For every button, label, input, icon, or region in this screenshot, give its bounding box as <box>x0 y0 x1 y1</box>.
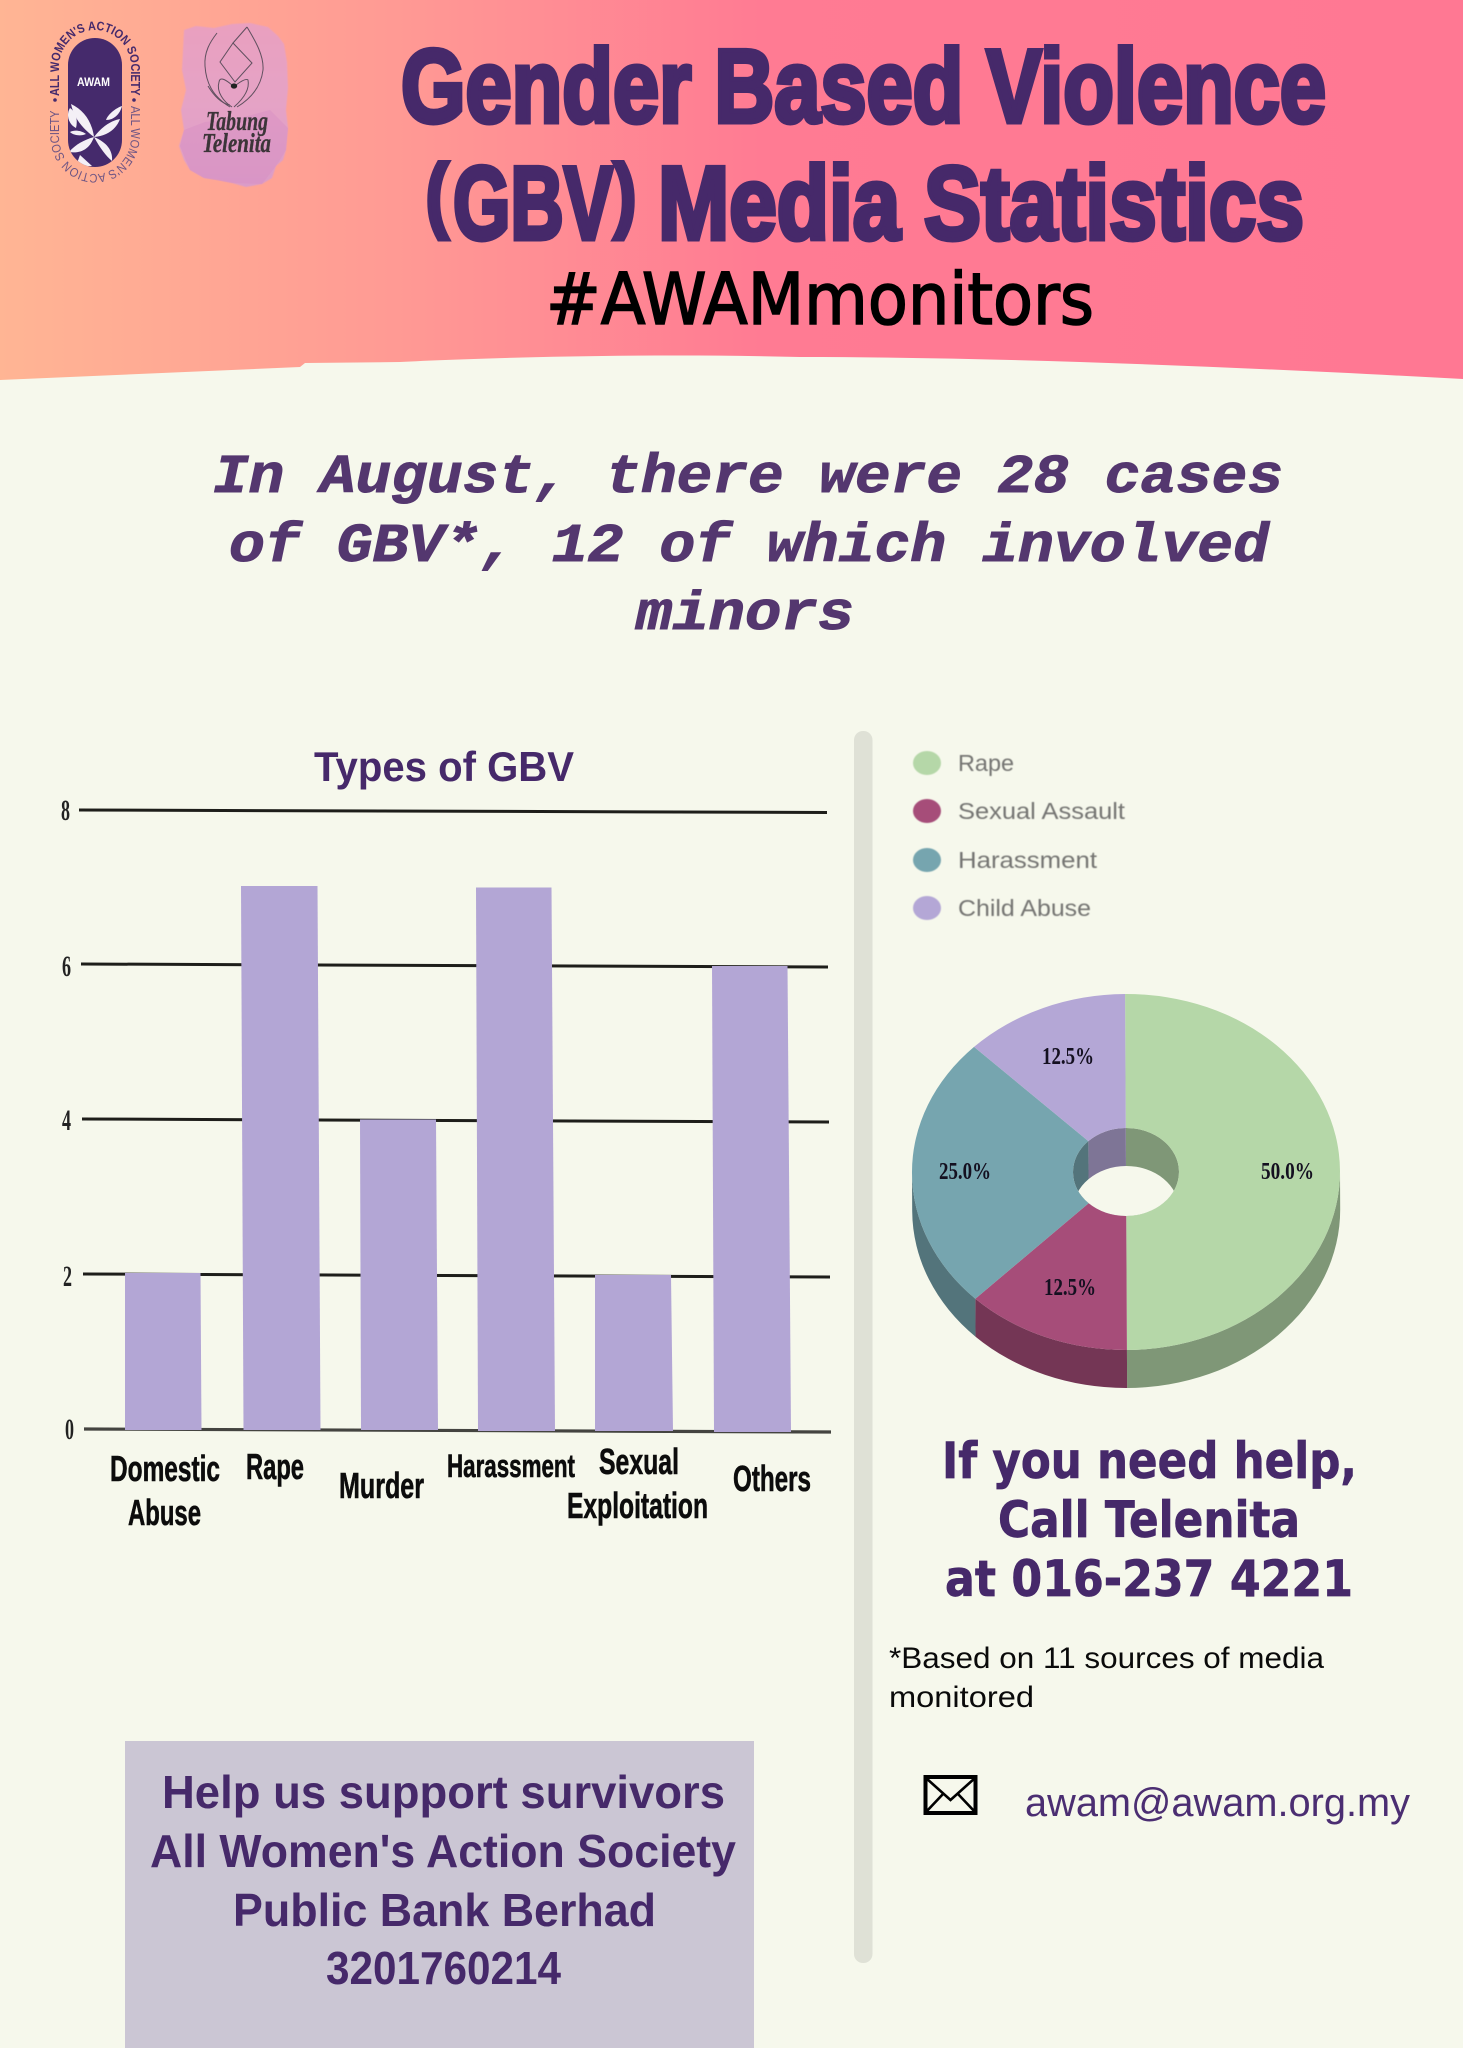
footnote: *Based on 11 sources of media <box>889 1642 1324 1675</box>
headline statement: minors <box>635 583 854 646</box>
logo: AWAM <box>50 22 140 183</box>
panel: donation box: Public Bank Berhad <box>233 1884 656 1936</box>
pie chart legend: Sexual Assault <box>958 798 1126 824</box>
donut chart: 50.0% <box>1261 1159 1314 1185</box>
helpline callout: Call Telenita <box>998 1491 1300 1549</box>
x axis labels: Domestic <box>110 1448 220 1489</box>
title: Media Statistics <box>658 146 1304 262</box>
title: ) <box>614 149 636 240</box>
logo: Tabung Telenita <box>179 23 288 187</box>
header banner <box>0 0 1463 380</box>
x axis labels: Sexual <box>599 1441 679 1482</box>
bar chart: Types of GBV <box>61 743 831 1533</box>
chart title: Types of GBV <box>314 743 574 790</box>
logo: Tabung Telenita: Tabung <box>206 106 268 136</box>
pie chart legend <box>913 750 1126 921</box>
x axis labels: Abuse <box>128 1492 201 1533</box>
footnote: monitored <box>889 1681 1034 1714</box>
donut chart: 12.5% <box>1042 1044 1094 1070</box>
headline statement: of GBV*, 12 of which involved <box>229 515 1270 578</box>
panel: donation box: Help us support survivors <box>162 1766 725 1818</box>
y axis labels <box>61 794 74 1446</box>
y axis labels: 4 <box>62 1104 71 1137</box>
panel: donation box: 3201760214 <box>326 1942 561 1994</box>
headline statement <box>213 446 1283 646</box>
pie chart legend: Child Abuse <box>958 895 1091 921</box>
y axis labels: 0 <box>65 1413 74 1446</box>
y axis labels: 2 <box>63 1260 72 1293</box>
panel: donation box: All Women's Action Society <box>150 1825 736 1877</box>
title <box>401 29 1326 262</box>
footnote <box>889 1642 1324 1714</box>
title: ( <box>426 149 449 240</box>
x axis labels: Rape <box>246 1446 304 1487</box>
donut chart <box>911 993 1341 1389</box>
icon: envelope <box>926 1777 976 1813</box>
logo: AWAM: ALL WOMEN'S ACTION SOCIETY <box>50 22 140 96</box>
helpline callout: If you need help, <box>942 1432 1357 1490</box>
pie chart legend: Harassment <box>958 847 1098 873</box>
hashtag: #AWAMmonitors <box>546 258 1094 341</box>
logo: Tabung Telenita: Telenita <box>202 128 271 158</box>
logo: AWAM: AWAM <box>77 75 110 89</box>
donut chart: 12.5% <box>1044 1275 1096 1301</box>
email address: awam@awam.org.my <box>1025 1781 1410 1825</box>
panel: donation box <box>125 1741 754 2048</box>
helpline callout: at 016-237 4221 <box>945 1550 1353 1608</box>
y axis labels: 6 <box>62 950 71 983</box>
y axis labels: 8 <box>61 794 70 827</box>
x axis labels: Exploitation <box>567 1485 708 1526</box>
donut chart: 25.0% <box>939 1159 991 1185</box>
bars <box>125 886 791 1432</box>
headline statement: In August, there were 28 cases <box>213 446 1283 509</box>
title: GBV <box>453 146 613 262</box>
x axis labels: Murder <box>339 1465 424 1506</box>
helpline callout <box>942 1432 1357 1608</box>
pie chart legend: Rape <box>958 750 1014 776</box>
x axis labels: Harassment <box>447 1448 575 1484</box>
vertical divider <box>854 731 872 1963</box>
x axis labels <box>110 1441 811 1533</box>
x axis labels: Others <box>733 1458 811 1499</box>
logo: AWAM: ALL WOMEN'S ACTION SOCIETY <box>50 106 140 183</box>
